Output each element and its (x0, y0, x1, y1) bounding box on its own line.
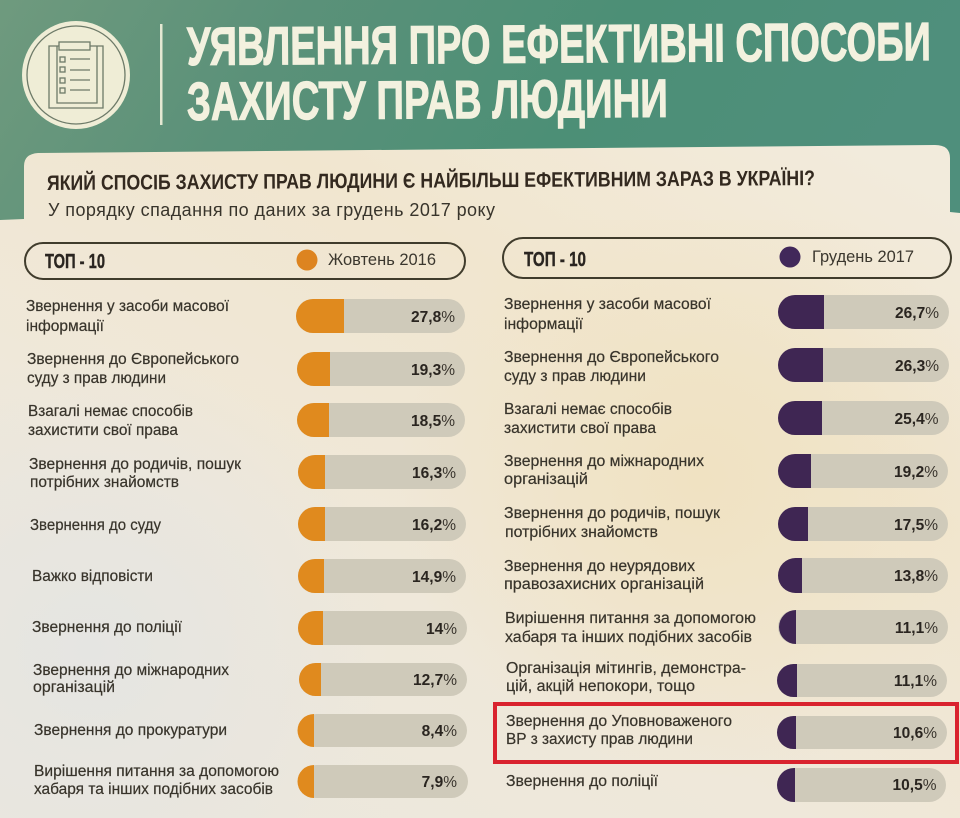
icon: clipboard checklist (22, 21, 130, 129)
right row 4: Звернення до міжнародних (504, 453, 704, 470)
left row 4: Звернення до родичів, пошук (29, 456, 241, 473)
left row 3 (28, 403, 465, 439)
panel: left column, October 2016 (25, 243, 468, 798)
left row 2 (27, 351, 465, 387)
left row 2: 19,3% (411, 362, 455, 379)
left row 8: організацій (33, 679, 115, 696)
right row 4: організацій (504, 471, 588, 488)
right row 3: 25,4% (895, 411, 939, 428)
left row 10: хабаря та інших подібних засобів (34, 781, 273, 798)
left row 9: 8,4% (422, 723, 457, 740)
right row 3: Взагалі немає способів (504, 401, 672, 418)
right row 6: Звернення до неурядових (504, 558, 695, 575)
left row 5: 16,2% (412, 517, 456, 534)
paper shading (0, 220, 960, 818)
left row 3: 18,5% (411, 413, 455, 430)
left row 1: 27,8% (411, 309, 455, 326)
left legend pill: Жовтень 2016 (328, 251, 436, 269)
left legend pill (25, 243, 465, 279)
right row 2: суду з прав людини (504, 368, 646, 385)
right row 5: Звернення до родичів, пошук (504, 505, 720, 522)
right row 3: захистити свої права (504, 420, 656, 437)
right row 8: 11,1% (894, 673, 937, 690)
left row 6 (32, 559, 466, 593)
right row 8: Організація мітингів, демонстра- (506, 660, 746, 677)
title: ЗАХИСТУ ПРАВ ЛЮДИНИ (187, 69, 668, 132)
panel: right column, December 2017 (495, 238, 957, 802)
left row 4: потрібних знайомств (30, 474, 179, 491)
left row 5 (30, 507, 466, 541)
right row 9, highlighted: ВР з захисту прав людини (506, 731, 693, 748)
right row 4 (504, 453, 948, 488)
right row 5: 17,5% (894, 517, 938, 534)
right row 5: потрібних знайомств (505, 524, 658, 541)
left legend pill: ТОП - 10 (45, 251, 105, 273)
left row 6: 14,9% (412, 569, 456, 586)
left row 10: Вирішення питання за допомогою (34, 763, 279, 780)
right row 6 (504, 558, 948, 593)
right row 9, highlighted: 10,6% (893, 725, 937, 742)
left row 4 (29, 455, 466, 491)
right row 10 (506, 768, 946, 802)
right legend pill: ТОП - 10 (524, 249, 586, 271)
right row 6: правозахисних організацій (504, 576, 704, 593)
title (187, 12, 931, 132)
right row 2 (504, 348, 949, 385)
subtitle: У порядку спадання по даних за грудень 2017 року (48, 200, 495, 220)
right row 7: 11,1% (895, 620, 938, 637)
right row 4: 19,2% (894, 464, 938, 481)
left row 5: Звернення до суду (30, 517, 161, 534)
left row 1 (26, 298, 465, 335)
left row 8 (33, 662, 467, 696)
right row 1: Звернення у засоби масової (504, 296, 712, 313)
right row 1 (504, 295, 949, 333)
left row 3: Взагалі немає способів (28, 403, 193, 420)
left row 9: Звернення до прокуратури (34, 722, 227, 739)
right row 8: цій, акцій непокори, тощо (506, 678, 695, 695)
left row 1: Звернення у засоби масової (26, 298, 230, 315)
header divider (160, 24, 162, 125)
right row 7 (505, 610, 948, 646)
left row 2: Звернення до Європейського (27, 351, 239, 368)
question heading: ЯКИЙ СПОСІБ ЗАХИСТУ ПРАВ ЛЮДИНИ Є НАЙБІЛЬШ ЕФЕКТИВНИМ ЗАРАЗ В УКРАЇНІ? (47, 166, 815, 195)
left row 1: інформації (26, 318, 105, 335)
right row 2: Звернення до Європейського (504, 349, 719, 366)
left row 2: суду з прав людини (27, 370, 166, 387)
left row 6: Важко відповісти (32, 568, 153, 585)
right row 10: Звернення до поліції (506, 773, 659, 790)
left row 9 (34, 714, 467, 747)
right row 2: 26,3% (895, 358, 939, 375)
left row 7: 14% (426, 621, 457, 638)
left row 8: 12,7% (413, 672, 457, 689)
left row 8: Звернення до міжнародних (33, 662, 229, 679)
right legend pill: Грудень 2017 (812, 248, 914, 266)
right row 1: 26,7% (895, 305, 939, 322)
right row 7: хабаря та інших подібних засобів (505, 629, 752, 646)
left row 7 (32, 611, 467, 645)
right row 6: 13,8% (894, 568, 938, 585)
right row 8 (506, 660, 947, 697)
left row 4: 16,3% (412, 465, 456, 482)
right legend pill (503, 238, 951, 278)
green header background (0, 0, 960, 240)
right row 9, highlighted: Звернення до Уповноваженого (506, 713, 732, 730)
right row 10: 10,5% (893, 777, 937, 794)
left row 3: захистити свої права (28, 422, 178, 439)
red highlight frame (495, 704, 957, 762)
left row 10: 7,9% (422, 774, 457, 791)
left row 10 (34, 763, 468, 798)
left row 7: Звернення до поліції (32, 619, 183, 636)
right row 9, highlighted (495, 704, 957, 762)
right row 5 (504, 505, 948, 541)
right row 3 (504, 401, 949, 437)
right row 1: інформації (504, 316, 584, 333)
right row 7: Вирішення питання за допомогою (505, 610, 756, 627)
